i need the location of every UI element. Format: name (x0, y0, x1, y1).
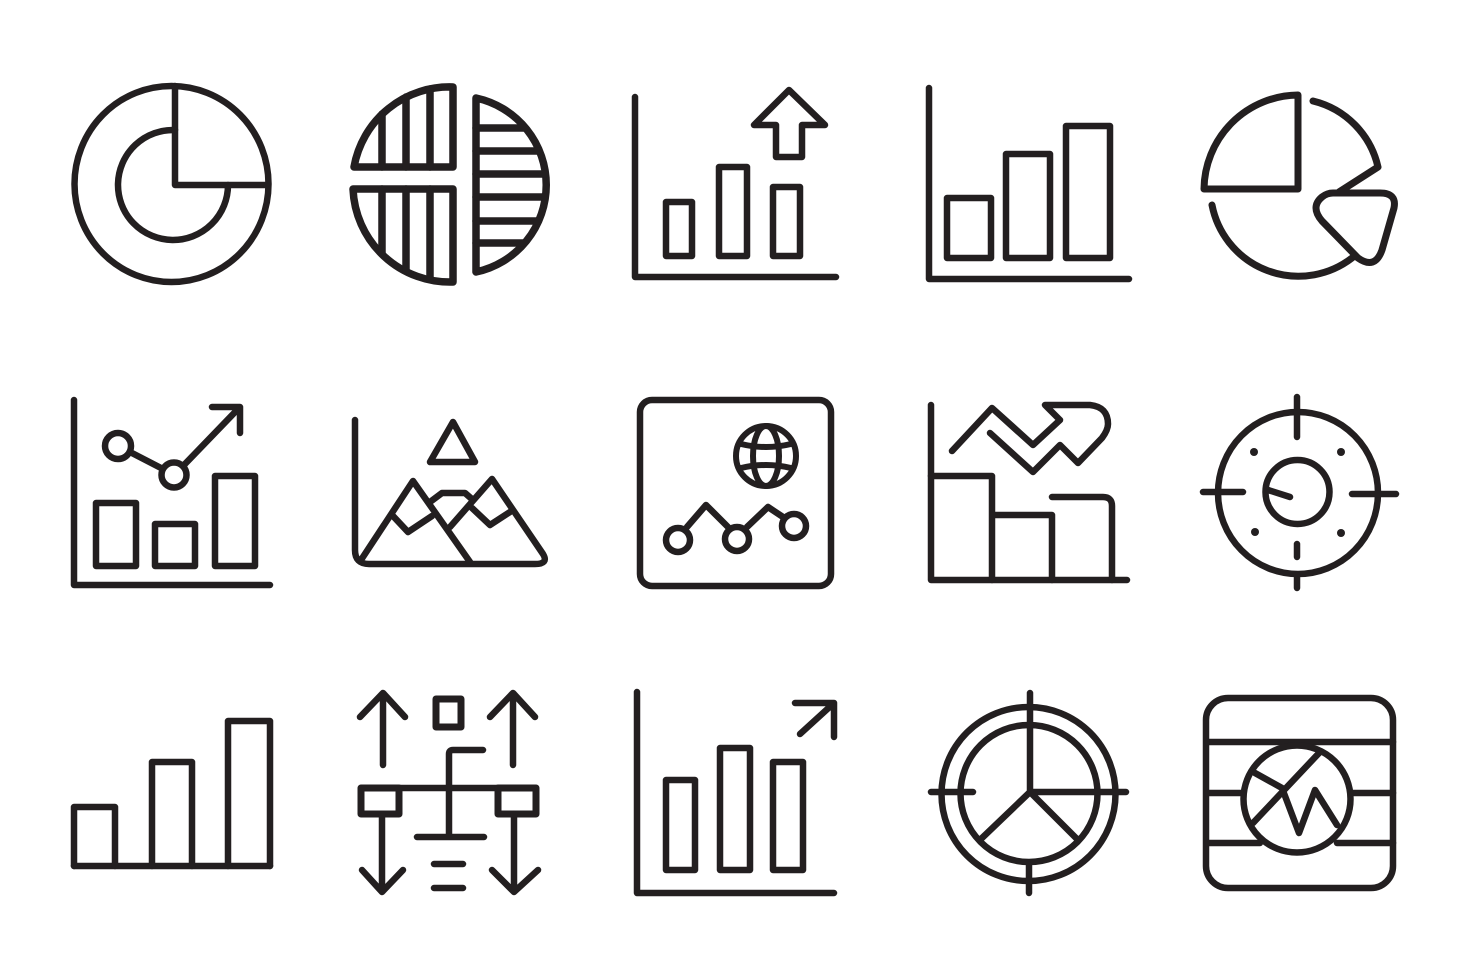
icon: bar chart with up arrow (635, 90, 836, 277)
icon: globe line chart card (640, 400, 831, 586)
icon: striped pie chart (353, 87, 546, 282)
right half (476, 98, 546, 272)
icon: bars with trend line (74, 400, 270, 585)
bottom-left quadrant (353, 189, 453, 282)
icon: arrows flow diagram (360, 693, 538, 892)
icon: target pie chart (931, 693, 1126, 893)
icon: step bar chart (74, 721, 270, 866)
top-left quadrant (354, 87, 453, 167)
icon: falling bars with zigzag arrow (931, 405, 1127, 580)
icon: target dial (1203, 397, 1396, 588)
icon: pie chart with slice (1204, 95, 1394, 276)
icon: donut chart (74, 86, 268, 282)
globe (736, 426, 796, 486)
icon: rising bar chart (929, 88, 1129, 279)
icon: bar chart with arrow (637, 692, 834, 893)
icon: mountain chart (355, 420, 545, 564)
icon: card with pie chart (1206, 698, 1393, 888)
